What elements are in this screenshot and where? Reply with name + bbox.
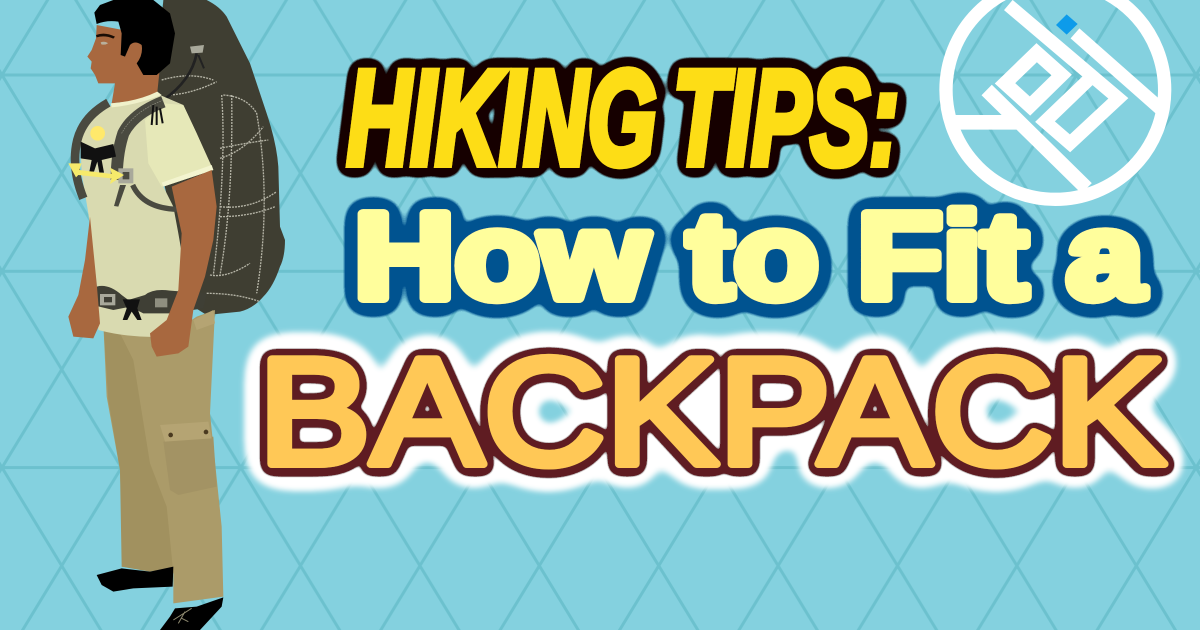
head and neck xyxy=(87,25,160,103)
title line 3: Backpack: BACKPACK xyxy=(258,327,1166,497)
boots xyxy=(97,567,223,630)
hip belt xyxy=(97,286,207,320)
title line 2: How to Fit a: How to Fit a xyxy=(354,188,1145,324)
logo accent: blue diamond xyxy=(1056,14,1078,35)
trousers xyxy=(97,310,223,630)
hair xyxy=(94,0,175,75)
title line 1: Hiking Tips: HIKING TIPS: xyxy=(347,44,899,193)
cargo pocket xyxy=(160,422,217,495)
eyebrow xyxy=(96,34,115,39)
backpack xyxy=(157,0,285,315)
t-shirt xyxy=(80,92,213,337)
adjustment marker: yellow dot xyxy=(90,126,105,141)
logo: circular monogram xyxy=(946,0,1165,199)
left arm and hand xyxy=(68,217,100,338)
shoulder straps and sternum strap xyxy=(75,100,177,209)
eye xyxy=(101,42,108,45)
adjustment arrow: double headed xyxy=(68,163,124,184)
illustration: hiker wearing backpack xyxy=(68,0,285,630)
right arm and hand xyxy=(150,170,217,357)
